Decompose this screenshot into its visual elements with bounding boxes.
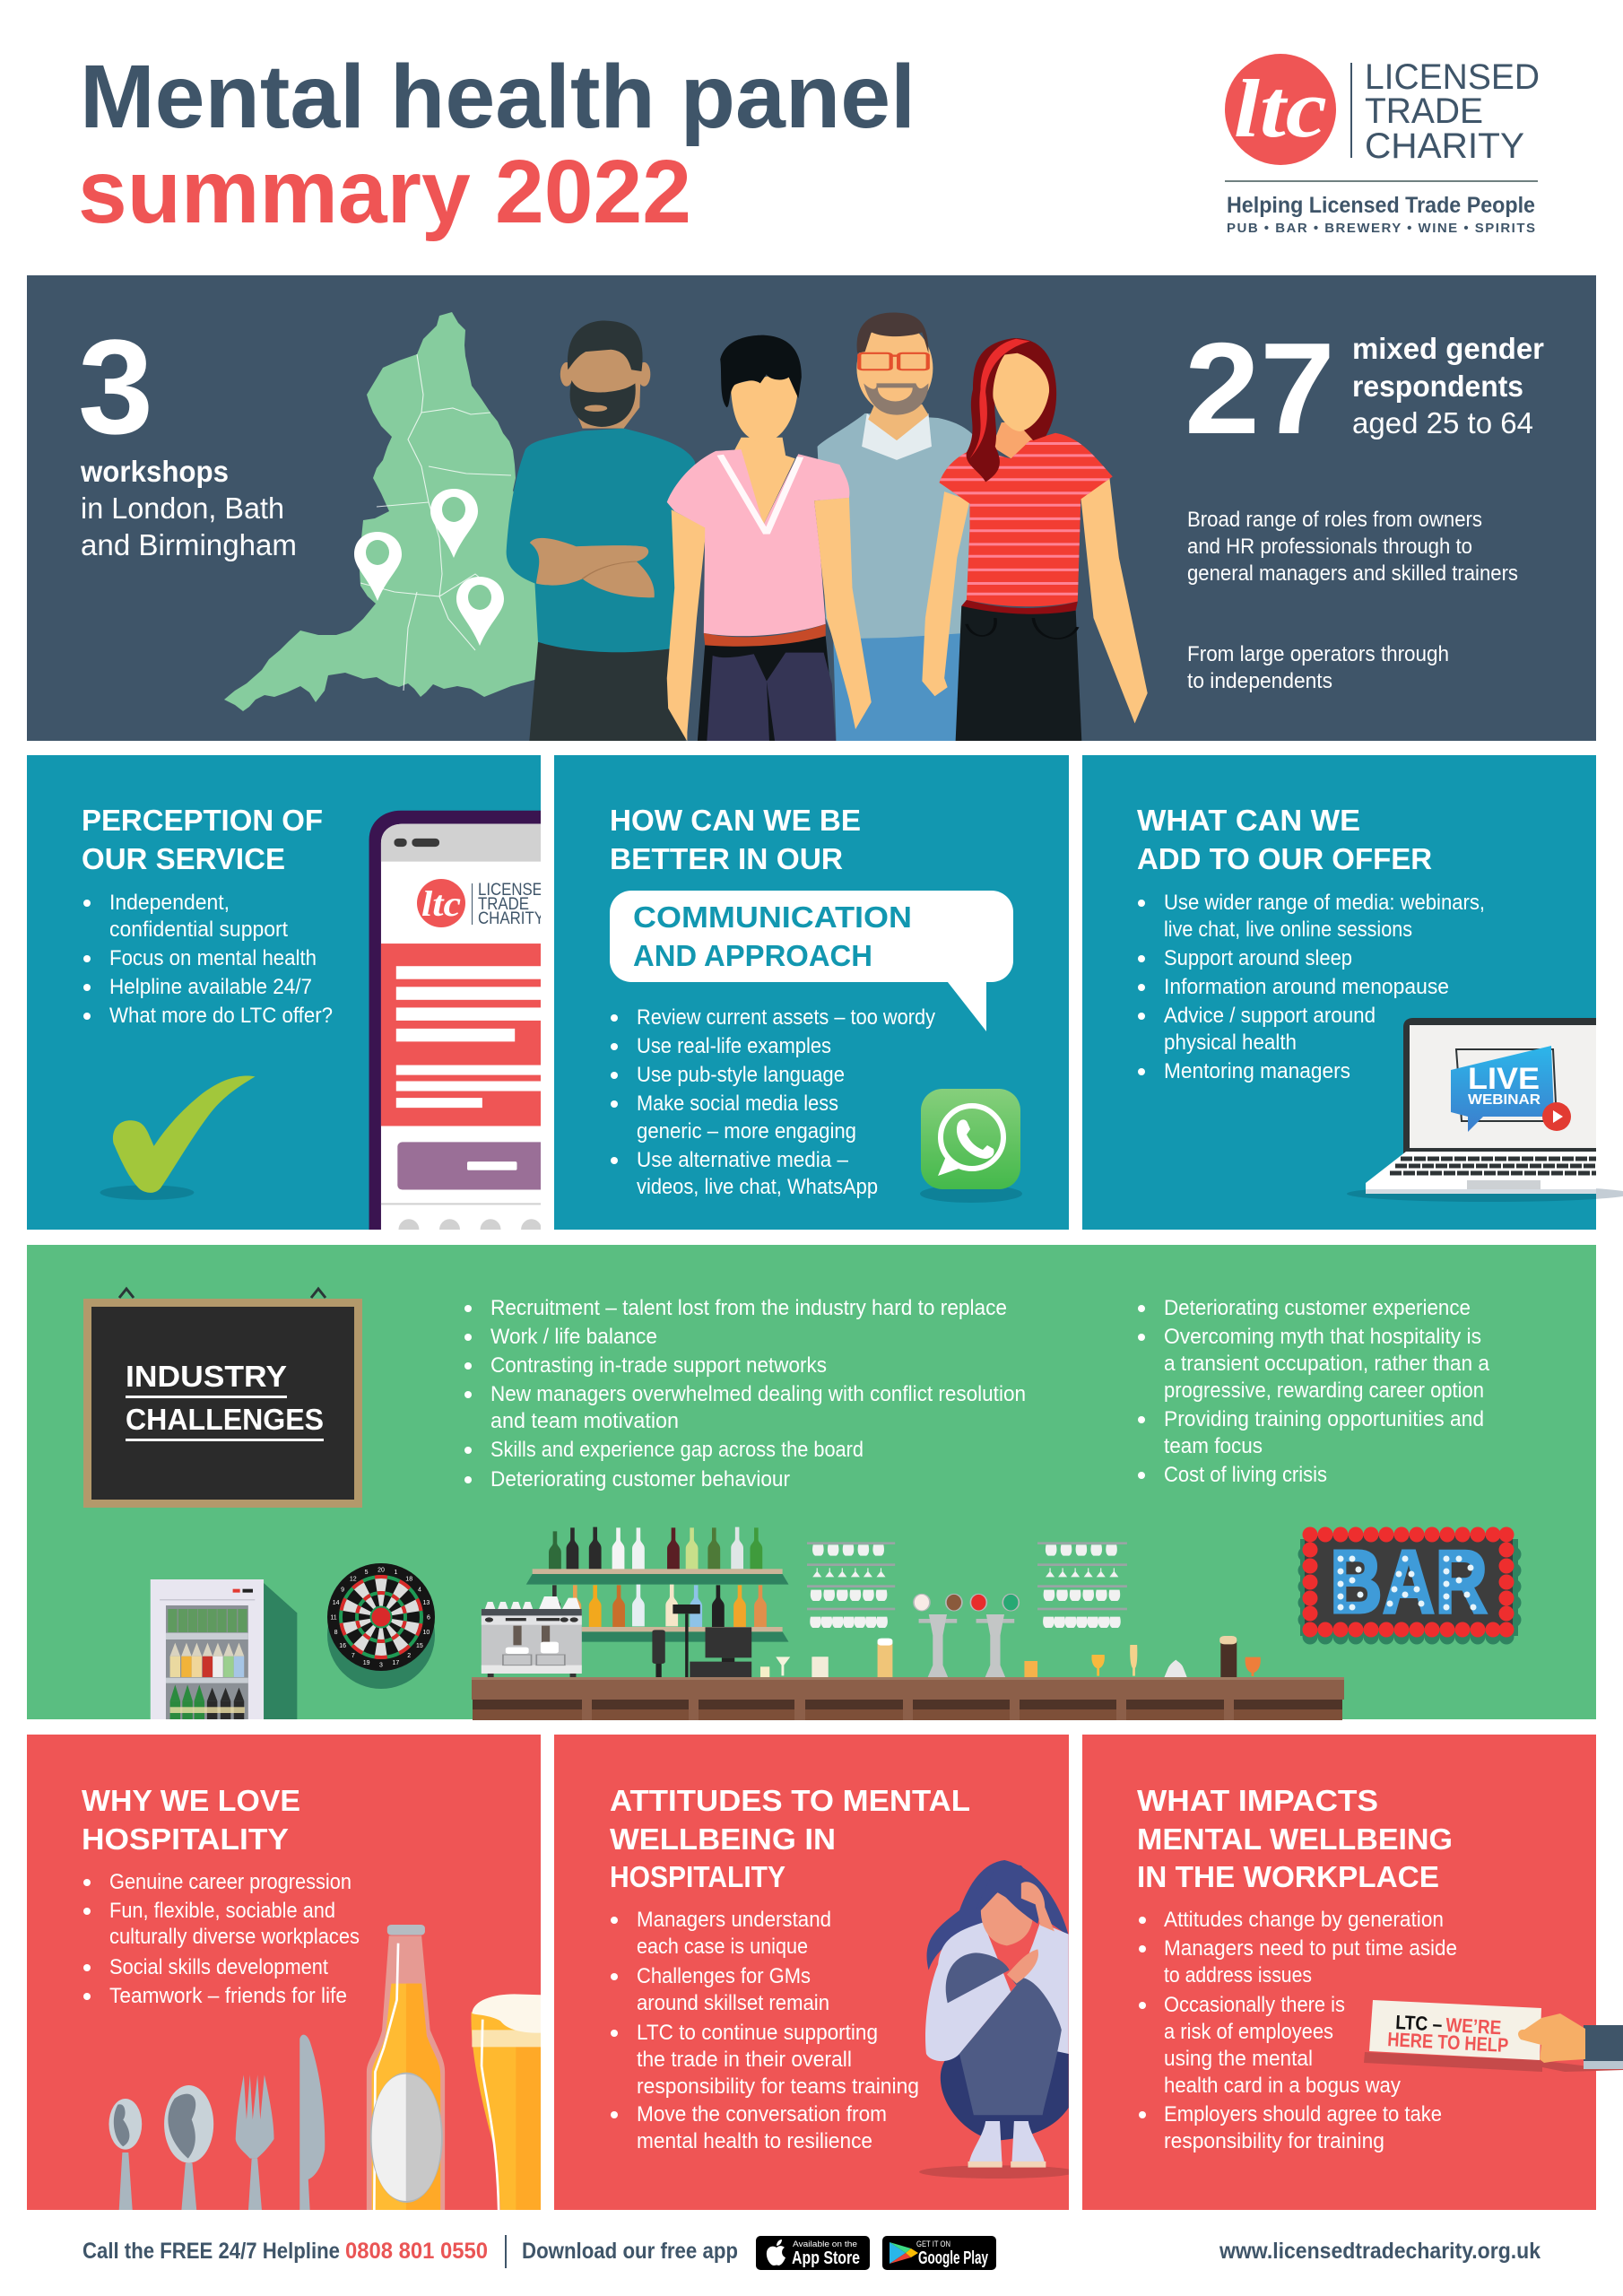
callout: LTC we're here to help: HERE TO HELP [1387,2028,1509,2057]
heading: HOSPITALITY [82,1822,289,1856]
bullet list: each case is unique [637,1935,808,1959]
stat: 3 workshops: 3 [78,311,153,462]
bullet list: Challenges for GMs [637,1964,811,1988]
stat: 3 workshops [78,311,297,561]
heading [1137,804,1432,875]
icon: green tick [100,1075,255,1200]
stat: 3 workshops: and Birmingham [81,528,297,561]
panel: attitudes to mental wellbeing [554,1735,1076,2210]
map of England with pins [224,312,538,711]
bullet list: column one [464,1296,1026,1492]
stat: 27 respondents: 27 [1185,316,1335,461]
panel: communication and approach [554,755,1069,1230]
badge: Google Play [882,2236,996,2270]
heading: HOW CAN WE BE [610,804,861,837]
bullet list: Helpline available 24/7 [109,975,312,999]
bullet list: column two: a transient occupation, rather than a [1164,1352,1490,1376]
bullet list: confidential support [109,918,288,942]
illustration: coffee machine and till [482,1596,829,1677]
icon: pint glass [472,1994,541,2210]
person: woman in red striped top [922,338,1148,751]
stat: 3 workshops: in London, Bath [81,491,284,525]
bullet list: Move the conversation from [637,2102,887,2126]
heading: OUR SERVICE [82,842,285,875]
callout: LTC we're here to help: LTC – [1395,2011,1443,2036]
heading: WHAT CAN WE [1137,804,1360,837]
bullet list: column two: Providing training opportunities and [1164,1407,1484,1431]
text: operators: From large operators through [1187,642,1449,666]
footer [82,2235,1541,2270]
bullet list: Managers understand [637,1908,831,1932]
mini logo: CHARITY [478,909,544,928]
logo: Licensed Trade Charity: CHARITY [1365,126,1524,166]
bullet list: Social skills development [109,1955,328,1979]
speech bubble: communication and approach: AND APPROACH [633,939,872,972]
icon: map pin Birmingham [430,489,478,558]
logo: Licensed Trade Charity: ltc [1234,63,1327,154]
speech bubble: communication and approach: COMMUNICATION [633,900,912,934]
illustration: dartboard: 6 [427,1614,430,1622]
illustration: dartboard: 1 [394,1570,397,1576]
icon: map pin London [456,577,504,646]
badge: live webinar [1451,1046,1571,1132]
illustration: dartboard: 10 [423,1630,430,1636]
blackboard: industry challenges [83,1289,362,1508]
bullet list: Make social media less [637,1091,838,1116]
icon: WhatsApp [920,1089,1022,1203]
heading [1137,1784,1453,1893]
heading: WELLBEING IN [610,1822,836,1856]
illustration: dartboard: 18 [405,1577,412,1583]
heading: MENTAL WELLBEING [1137,1822,1453,1856]
text: operators: to independents [1187,669,1332,693]
bullet list: column two: progressive, rewarding career option [1164,1378,1484,1403]
badge: Google Play: Google Play [918,2248,989,2268]
illustration: dartboard: 20 [378,1568,385,1573]
bullet list: Use pub-style language [637,1063,845,1087]
bullet list: Focus on mental health [109,946,317,970]
logo: Licensed Trade Charity: LICENSED [1365,57,1540,97]
bullet list: responsibility for teams training [637,2074,919,2099]
illustration: dartboard: 17 [393,1660,399,1666]
bullet list: around skillset remain [637,1991,829,2015]
bullet list [1139,1908,1457,2153]
illustration: dartboard: 5 [365,1570,369,1576]
illustration: dartboard: 8 [334,1630,338,1636]
illustration: phone showing LTC site [369,811,541,1230]
icon: beer bottle [367,1925,445,2213]
bullet list: a risk of employees [1164,2020,1333,2044]
logo: Licensed Trade Charity: TRADE [1365,91,1483,131]
heading: PERCEPTION OF [82,804,323,837]
bullet list: column two: team focus [1164,1434,1263,1458]
heading: IN THE WORKPLACE [1137,1860,1439,1893]
panel: perception of our service [27,755,563,1240]
bullet list: Managers need to put time aside [1164,1936,1457,1961]
bullet list: column one: New managers overwhelmed dealing with conflict resolution [490,1382,1026,1406]
bullet list [611,1005,935,1199]
bullet list: column two: Overcoming myth that hospitality is [1164,1325,1481,1349]
callout: LTC we're here to help: WE’RE [1445,2013,1502,2039]
badge: live webinar: LIVE [1468,1062,1540,1096]
stat: 27 respondents: respondents [1352,370,1523,403]
illustration: dartboard: 3 [379,1663,383,1668]
panel: why we love hospitality [27,1735,564,2215]
website: www.licensedtradecharity.org.uk [1219,2239,1541,2264]
icon: cutlery [108,2035,325,2213]
icon: map pin Bath [354,532,402,601]
bullet list: Advice / support around [1164,1004,1376,1028]
bullet list: Information around menopause [1164,975,1449,999]
bullet list: column one: Recruitment – talent lost from the industry hard to replace [490,1296,1007,1320]
bullet list: Independent, [109,891,230,915]
bullet list [83,891,333,1028]
bullet list: What more do LTC offer? [109,1004,333,1028]
bullet list: Occasionally there is [1164,1993,1345,2017]
bullet list: to address issues [1164,1963,1312,1987]
mini logo: ltc [421,883,461,924]
bullet list: health card in a bogus way [1164,2074,1401,2098]
illustration: dartboard: 16 [339,1643,346,1649]
text: operators [1187,642,1449,693]
heading: HOSPITALITY [610,1860,785,1893]
bullet list: column one: Contrasting in-trade support networks [490,1353,827,1378]
bullet list: Review current assets – too wordy [637,1005,935,1030]
heading: ATTITUDES TO MENTAL [610,1784,970,1817]
panel: what impacts mental wellbeing [1082,1735,1623,2210]
badge: App Store: App Store [792,2248,860,2268]
bullet list: Mentoring managers [1164,1059,1350,1083]
bullet list: Fun, flexible, sociable and [109,1899,335,1923]
bullet list: responsibility for training [1164,2129,1384,2153]
bullet list: Use wider range of media: webinars, [1164,891,1485,915]
bullet list [611,1908,919,2153]
blackboard: industry challenges: CHALLENGES [126,1403,324,1436]
illustration: dartboard: 9 [341,1587,344,1593]
stat: 3 workshops: workshops [80,455,229,488]
bullet list: Employers should agree to take [1164,2102,1442,2126]
text: range of roles: and HR professionals through to [1187,535,1472,559]
logo: Licensed Trade Charity: PUB • BAR • BREWERY • WINE • SPIRITS [1227,221,1535,236]
bullet list: column two: Cost of living crisis [1164,1463,1327,1487]
bullet list: using the mental [1164,2047,1313,2071]
illustration: dartboard: 12 [350,1577,357,1583]
bullet list: Teamwork – friends for life [109,1984,347,2008]
mini logo [417,879,541,927]
panel: industry challenges [27,1245,1596,1722]
bullet list [83,1870,360,2008]
bullet list: LTC to continue supporting [637,2021,878,2045]
bullet list: column one: Work / life balance [490,1325,657,1349]
panel: what can we add to our offer [1082,755,1623,1230]
bullet list [1138,891,1485,1083]
title: Mental health panel [80,47,916,147]
helpline: 0808 801 0550 [345,2239,488,2264]
badge: App Store: Available on the [793,2239,857,2248]
speech bubble: communication and approach [610,891,1013,1031]
download app text: Download our free app [522,2239,738,2264]
illustration: drinks fridge [151,1579,297,1722]
illustration: dartboard: 14 [333,1600,340,1606]
heading [610,1784,970,1893]
logo: Licensed Trade Charity: Helping Licensed Trade People [1227,193,1535,218]
person: man in grey-blue jumper with glasses [818,313,979,751]
illustration: glass racks, taps and drinks [807,1542,1261,1677]
illustration: cutlery, beer bottle and glass [108,1925,564,2215]
title [78,47,916,242]
bullet list: Use real-life examples [637,1034,831,1058]
heading: WHAT IMPACTS [1137,1784,1378,1817]
mini logo: TRADE [478,895,529,914]
logo: Licensed Trade Charity [1225,54,1540,236]
bullet list: column two [1138,1296,1490,1487]
badge: App Store [756,2236,870,2270]
bullet list: Use alternative media – [637,1148,849,1172]
illustration: dartboard: 19 [363,1660,370,1666]
illustration: bar shelves with bottles [526,1527,789,1642]
illustration: four people [507,313,1148,751]
heading: BETTER IN OUR [610,842,843,875]
bullet list: Attitudes change by generation [1164,1908,1444,1932]
bullet list: column one: and team motivation [490,1409,679,1433]
callout: LTC we're here to help [1364,2000,1623,2072]
illustration: distressed woman [919,1860,1076,2179]
sign: BAR: BAR [1330,1532,1488,1632]
bullet list: column two: Deteriorating customer experience [1164,1296,1471,1320]
helpline: Call the FREE 24/7 Helpline [82,2239,340,2264]
bullet list: physical health [1164,1031,1297,1055]
person: man in teal sweater [507,321,707,751]
bullet list: live chat, live online sessions [1164,918,1412,942]
illustration: dartboard: 15 [416,1643,423,1649]
text: range of roles: general managers and skilled trainers [1187,561,1518,586]
illustration: dartboard [327,1563,435,1689]
badge: live webinar: WEBINAR [1468,1092,1541,1108]
stat: 27 respondents [1185,316,1544,461]
bullet list: the trade in their overall [637,2048,852,2072]
panel: hero workshops and respondents [27,275,1596,751]
illustration: dartboard: 11 [330,1614,337,1622]
heading [610,804,861,875]
stat: 27 respondents: aged 25 to 64 [1352,406,1533,439]
heading [82,804,323,875]
heading [82,1784,300,1856]
illustration: dartboard: 13 [423,1600,430,1606]
mini logo: LICENSED [478,881,553,900]
stat: 27 respondents: mixed gender [1352,332,1544,365]
bullet list: Support around sleep [1164,946,1352,970]
badge: Google Play: GET IT ON [916,2239,950,2248]
bullet list: mental health to resilience [637,2129,872,2153]
heading: WHY WE LOVE [82,1784,300,1817]
bullet list: column one: Skills and experience gap across the board [490,1438,864,1462]
text: range of roles [1187,508,1518,586]
bullet list: column one: Deteriorating customer behaviour [490,1467,790,1492]
illustration: dartboard: 4 [418,1587,421,1593]
bullet list: videos, live chat, WhatsApp [637,1175,878,1199]
illustration: dartboard: 7 [352,1653,355,1659]
illustration: dartboard: 2 [407,1653,411,1659]
blackboard: industry challenges: INDUSTRY [126,1360,287,1393]
title: summary 2022 [78,142,691,242]
bullet list: generic – more engaging [637,1119,856,1144]
person: woman in pink top [667,335,872,751]
bullet list: Genuine career progression [109,1870,352,1894]
illustration: laptop with live webinar [1347,1018,1623,1202]
illustration: bar counter [472,1677,1344,1720]
text: range of roles: Broad range of roles from owners [1187,508,1482,532]
bullet list: culturally diverse workplaces [109,1925,360,1949]
heading: ADD TO OUR OFFER [1137,842,1432,875]
